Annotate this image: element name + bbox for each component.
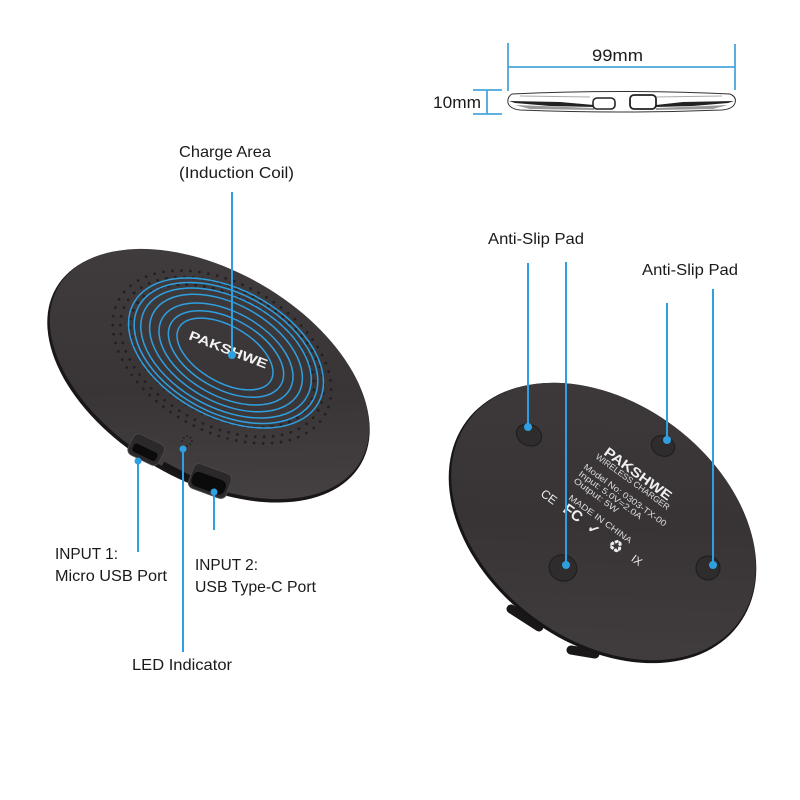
printed label text: PAKSHWE	[601, 444, 675, 503]
pad bottom-left	[545, 550, 581, 586]
port: micro usb	[126, 432, 167, 467]
charger bottom view	[395, 325, 800, 721]
dimension: height 10mm	[433, 90, 502, 114]
ports on the lower rim	[511, 609, 595, 654]
induction coil rings	[103, 247, 349, 459]
port: usb-c	[187, 462, 233, 500]
pad top-left	[513, 420, 545, 450]
dimension: width 99mm	[508, 43, 735, 91]
callout: input 2: USB Type-C Port	[195, 579, 317, 596]
callout: input 2: INPUT 2:	[195, 557, 258, 574]
port: usb-c side view	[630, 95, 656, 109]
pad bottom-right	[692, 552, 724, 584]
dimension: width 99mm: 99mm	[592, 46, 643, 65]
dimension: height 10mm: 10mm	[433, 93, 481, 112]
printed label text: Model No: 0303-TX-00	[582, 462, 669, 529]
callout: charge area: Charge Area	[179, 144, 271, 161]
charger top view	[4, 197, 413, 555]
callout: anti-slip pad right	[642, 262, 738, 569]
charger body	[395, 325, 800, 721]
printed label text: FC	[560, 501, 586, 526]
charger body	[4, 197, 413, 555]
printed label text: IX	[629, 553, 645, 569]
printed label text: Input: 5.0V=2.0A	[577, 469, 644, 522]
pad top-right	[648, 432, 678, 460]
printed label text: MADE IN CHINA	[567, 493, 634, 546]
printed label text: ✓	[585, 519, 603, 539]
logo: PAKSHWE	[187, 328, 270, 372]
printed label text: WIRELESS CHARGER	[594, 452, 672, 512]
side view charger	[508, 92, 735, 112]
callout: input 2	[195, 488, 317, 596]
callout: input 1: INPUT 1:	[55, 546, 118, 563]
callout: charge area: (Induction Coil)	[179, 165, 294, 182]
led indicator	[181, 435, 193, 447]
callout: input 1	[55, 458, 168, 585]
speaker-like dot pattern	[83, 235, 361, 479]
callout: input 1: Micro USB Port	[55, 568, 168, 585]
callout: led indicator: LED Indicator	[132, 657, 233, 674]
callout: anti-slip pad left	[488, 231, 584, 569]
gap between ports	[163, 464, 190, 478]
printed label text: CE	[538, 486, 560, 508]
callout: anti-slip pad left: Anti-Slip Pad	[488, 231, 584, 248]
printed label text	[538, 444, 675, 569]
callout: led indicator	[132, 446, 233, 674]
printed label text: ♻	[604, 534, 627, 559]
callout: charge area	[179, 144, 294, 359]
callout: anti-slip pad right: Anti-Slip Pad	[642, 262, 738, 279]
printed label text: Output: 5W	[572, 476, 621, 515]
port: micro usb side view	[593, 98, 615, 109]
